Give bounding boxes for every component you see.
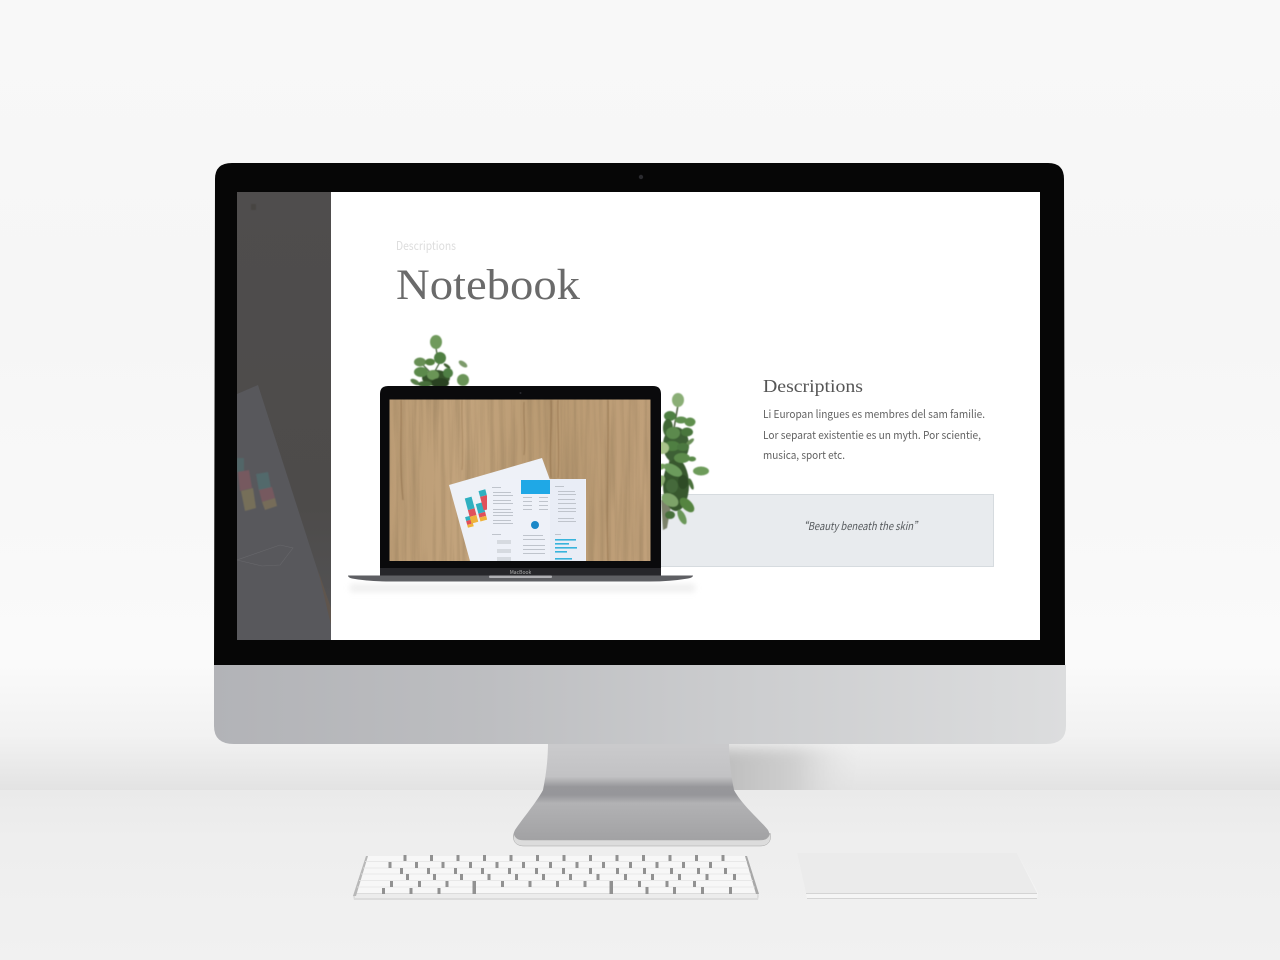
wood grain (401, 400, 608, 561)
sheet text lines (492, 486, 576, 561)
description body: musica, sport etc. (763, 447, 845, 463)
sheet blue header (521, 480, 550, 494)
monitor stand (513, 742, 771, 846)
quote text: “Beauty beneath the skin” (798, 518, 922, 534)
front resume sheet (487, 479, 586, 561)
small label: Descriptions (396, 237, 456, 254)
title: Notebook (396, 262, 581, 309)
description body: Lor separat existentie es un myth. Por scientie, (763, 427, 981, 443)
monitor chin (214, 665, 1066, 744)
description heading: Descriptions (763, 376, 863, 396)
description block (763, 376, 985, 463)
laptop (348, 386, 695, 592)
sheet bar chart (464, 489, 487, 528)
plant behind laptop (409, 335, 709, 530)
trackpad (797, 853, 1038, 899)
description body: Li Europan lingues es membres del sam familie. (763, 406, 985, 422)
stand shadow on wall (729, 744, 829, 790)
quote box (660, 494, 994, 566)
laptop screen photo (390, 400, 650, 561)
keyboard (353, 855, 759, 900)
laptop shadow (350, 584, 695, 592)
slide screen (237, 192, 1040, 640)
laptop chin (380, 568, 661, 576)
sheet blue badge (531, 521, 539, 529)
top plant (409, 335, 469, 388)
laptop webcam (520, 392, 522, 394)
left photo panel (237, 192, 331, 640)
laptop base (348, 576, 693, 582)
keyboard row lines (357, 862, 755, 887)
description body (763, 406, 985, 463)
right plant (648, 393, 709, 530)
desk surface (0, 790, 1280, 960)
wood texture (390, 400, 650, 561)
webcam (639, 175, 643, 179)
laptop trackpad notch (489, 576, 552, 578)
sheet skill bars (555, 539, 577, 560)
laptop brand: MacBook (510, 569, 532, 576)
monitor bezel (214, 163, 1065, 666)
keyboard key gaps (382, 855, 736, 894)
keyboard body (353, 856, 759, 900)
monitor body (214, 163, 1066, 744)
back resume sheet (449, 458, 550, 561)
laptop lid (380, 386, 661, 576)
